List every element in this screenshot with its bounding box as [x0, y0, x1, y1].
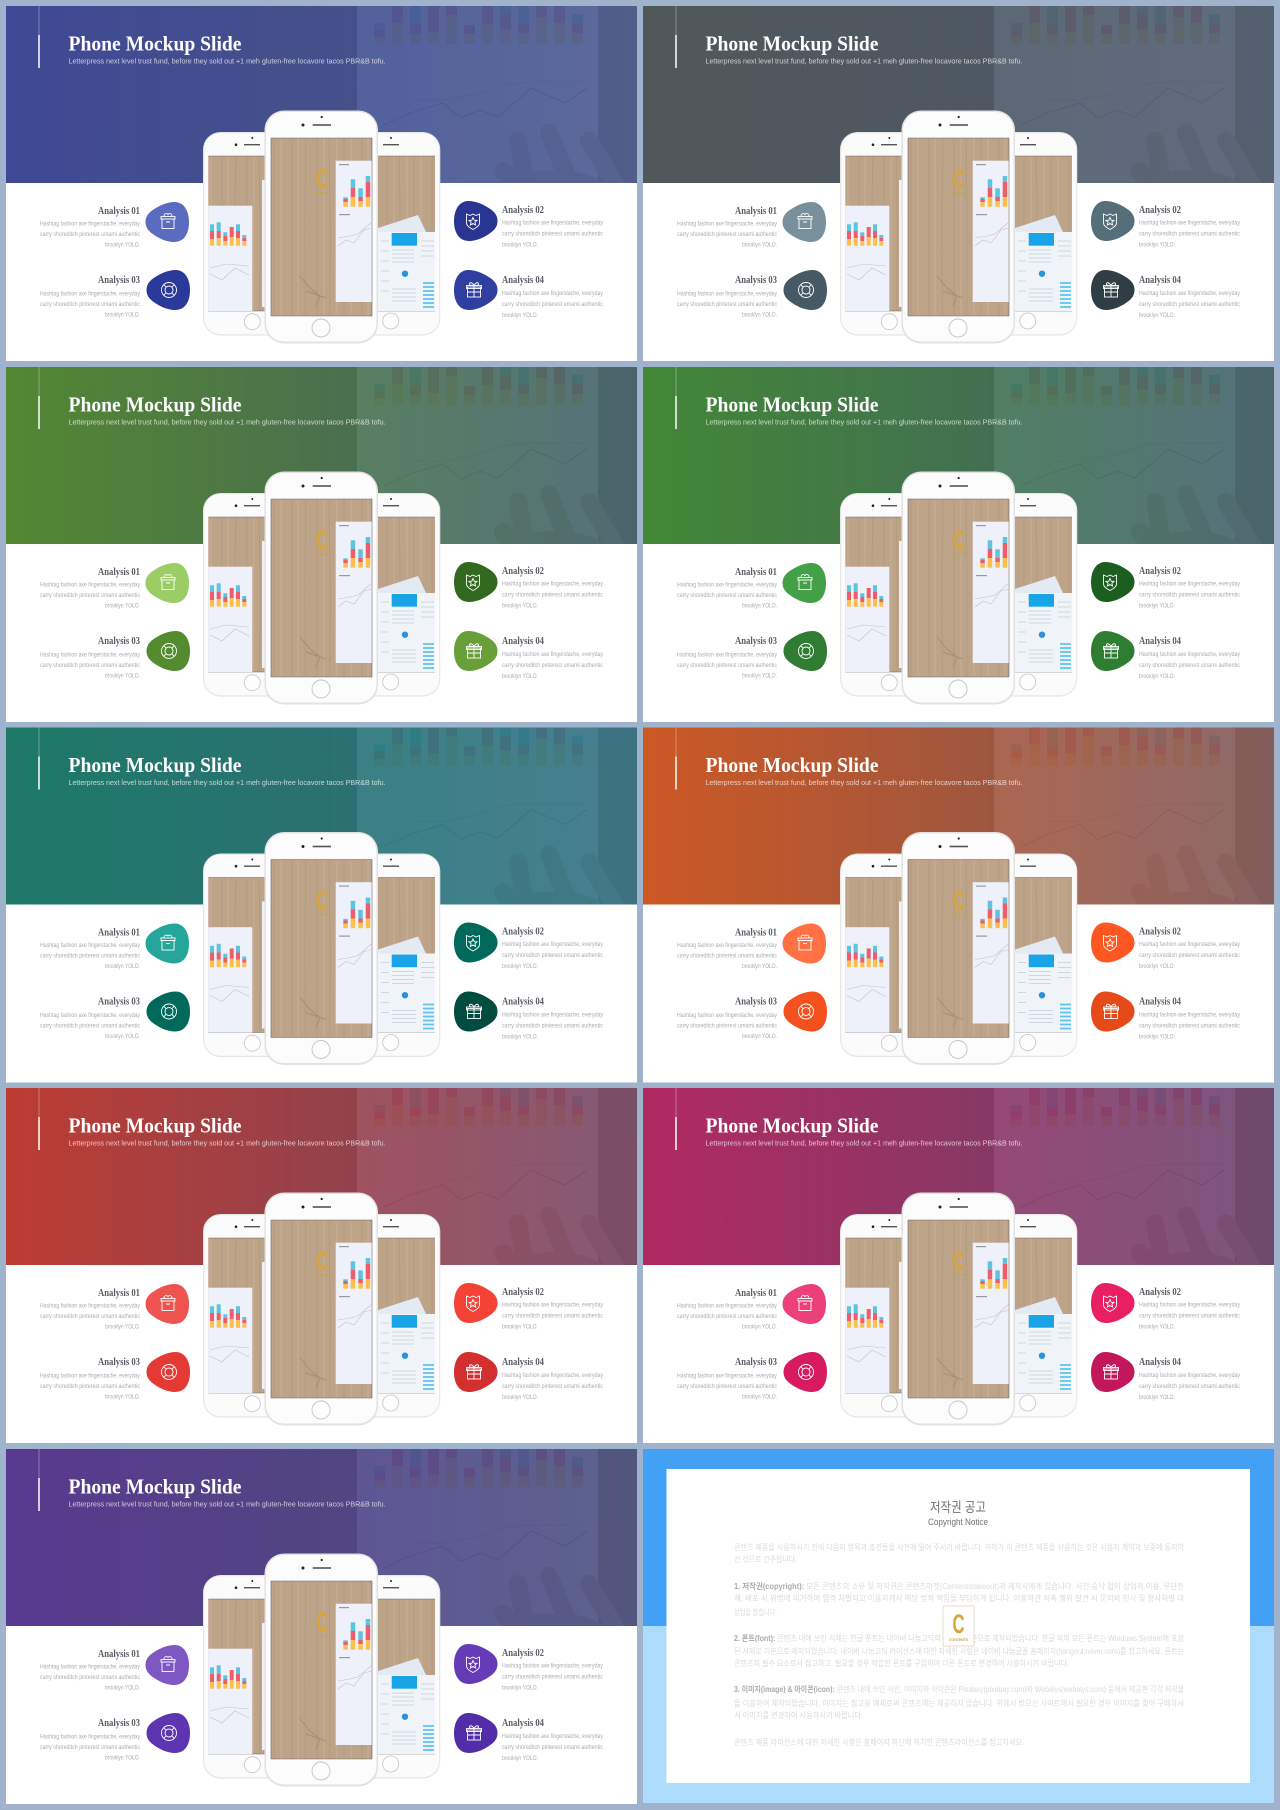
analysis 01	[40, 926, 140, 970]
analysis 03: Analysis 03	[735, 274, 777, 286]
subtitle: Letterpress next level trust fund, before they sold out +1 meh gluten-free locavore tacos PBR&B tofu.	[706, 56, 1022, 66]
analysis 01: Hashtag fashion axe fingerstache, everyday	[677, 582, 777, 588]
subtitle: Letterpress next level trust fund, before they sold out +1 meh gluten-free locavore tacos PBR&B tofu.	[68, 778, 386, 787]
subtitle: Letterpress next level trust fund, before they sold out +1 meh gluten-free locavore tacos PBR&B tofu.	[68, 418, 386, 426]
analysis 02: Analysis 02	[1139, 204, 1181, 216]
analysis 02	[502, 565, 603, 610]
analysis 03	[40, 635, 140, 680]
analysis 03: Analysis 03	[735, 635, 777, 647]
subtitle: Letterpress next level trust fund, before they sold out +1 meh gluten-free locavore tacos PBR&B tofu.	[68, 1138, 386, 1148]
analysis 04: carry shoreditch pinterest umami authentic	[502, 1384, 603, 1390]
icon: analysis 04 gift	[454, 1713, 498, 1753]
analysis 04: Hashtag fashion axe fingerstache, everyday	[502, 1373, 603, 1379]
analysis 04: carry shoreditch pinterest umami authentic	[1139, 1024, 1240, 1030]
analysis 04: Analysis 04	[502, 996, 544, 1008]
analysis 03: brooklyn YOLO.	[105, 1394, 140, 1400]
analysis 03: Analysis 03	[98, 1717, 140, 1729]
notice intro: 신 것으로 간주됩니다.	[734, 1554, 797, 1564]
analysis 01	[677, 926, 777, 970]
analysis 01: brooklyn YOLO.	[105, 242, 140, 248]
icon: analysis 03 lifebuoy	[146, 270, 190, 310]
icon: analysis 01 box	[782, 563, 826, 603]
analysis 03: carry shoreditch pinterest umami authentic	[677, 1024, 777, 1030]
analysis 02	[1139, 1286, 1240, 1330]
icon: analysis 04 gift	[1091, 1352, 1134, 1392]
icon: analysis 01 box	[782, 1284, 826, 1324]
analysis 04: Analysis 04	[1139, 1356, 1181, 1368]
analysis 01: Hashtag fashion axe fingerstache, everyday	[677, 943, 777, 949]
icon: analysis 03 lifebuoy	[784, 992, 827, 1032]
analysis 03: Hashtag fashion axe fingerstache, everyday	[677, 292, 777, 298]
notice section 3: 을 이용하여 제작되었습니다. 이미지는 참고용 예제로써 콘텐츠에는 제공하지 않습니다. 위에서 받으신 사이트에서 필요한 경우 이미지를 찾아 구매하셔	[734, 1698, 1184, 1708]
analysis 01: carry shoreditch pinterest umami authentic	[40, 954, 140, 960]
notice subheading: Copyright Notice	[928, 1517, 988, 1527]
icon: analysis 02 shield	[1091, 922, 1134, 962]
analysis 03: brooklyn YOLO.	[742, 674, 777, 680]
icon: analysis 01 box	[146, 1284, 189, 1324]
analysis 01: Hashtag fashion axe fingerstache, everyday	[40, 582, 140, 588]
analysis 03	[40, 996, 140, 1040]
analysis 01: brooklyn YOLO.	[742, 1324, 777, 1330]
analysis 02: brooklyn YOLO.	[502, 604, 538, 610]
analysis 01	[40, 1287, 140, 1330]
icon: analysis 03 lifebuoy	[784, 631, 827, 671]
analysis 04	[502, 1356, 603, 1401]
slide: copyright notice	[643, 1449, 1274, 1803]
analysis 04: carry shoreditch pinterest umami authentic	[1139, 302, 1240, 308]
phone mockups	[203, 110, 440, 344]
analysis 01: Hashtag fashion axe fingerstache, everyday	[677, 222, 777, 228]
analysis 01: brooklyn YOLO.	[105, 604, 140, 610]
notice heading: 저작권 공고	[930, 1500, 986, 1515]
analysis 02: brooklyn YOLO.	[502, 964, 538, 970]
icon: analysis 01 box	[146, 563, 189, 603]
analysis 03: Analysis 03	[98, 274, 140, 286]
analysis 04: brooklyn YOLO.	[502, 1756, 538, 1762]
analysis 01: brooklyn YOLO.	[742, 964, 777, 970]
title: Phone Mockup Slide	[68, 32, 242, 56]
analysis 01: carry shoreditch pinterest umami authentic	[677, 954, 777, 960]
analysis 03	[677, 1356, 777, 1400]
notice section 1: 재, 배포 시 위법에 의거하여 엄격 처벌되고 이용자께서 해당 법적 책임을 부담하게 됩니다. 이용약관 저촉 행위 발견 시 문의와 민사 및 형사처벌 대	[734, 1593, 1184, 1603]
phone mockups	[840, 110, 1077, 344]
analysis 02: brooklyn YOLO.	[1139, 604, 1175, 610]
analysis 04: brooklyn YOLO.	[502, 1395, 538, 1401]
subtitle: Letterpress next level trust fund, before they sold out +1 meh gluten-free locavore tacos PBR&B tofu.	[706, 778, 1022, 787]
analysis 04	[502, 635, 603, 680]
icon: analysis 01 box	[782, 202, 826, 242]
phone mockups	[203, 1554, 440, 1786]
title: Phone Mockup Slide	[706, 392, 878, 416]
analysis 04: Hashtag fashion axe fingerstache, everyday	[502, 291, 603, 297]
icon: analysis 02 shield	[1091, 201, 1134, 241]
analysis 04: Analysis 04	[1139, 274, 1181, 286]
phone mockups	[840, 472, 1077, 704]
analysis 01: brooklyn YOLO.	[742, 242, 777, 248]
analysis 03: brooklyn YOLO.	[742, 1394, 777, 1400]
icon: analysis 03 lifebuoy	[784, 270, 827, 310]
subtitle: Letterpress next level trust fund, before they sold out +1 meh gluten-free locavore tacos PBR&B tofu.	[68, 1500, 386, 1508]
slide: lime green	[6, 367, 637, 722]
title: Phone Mockup Slide	[706, 1114, 878, 1138]
analysis 04: brooklyn YOLO.	[502, 674, 538, 680]
analysis 01	[40, 1648, 140, 1692]
analysis 03: Hashtag fashion axe fingerstache, everyday	[40, 1374, 140, 1380]
analysis 01: brooklyn YOLO.	[105, 964, 140, 970]
analysis 01: carry shoreditch pinterest umami authentic	[40, 1314, 140, 1320]
analysis 02: carry shoreditch pinterest umami authentic	[502, 953, 603, 959]
analysis 01: Hashtag fashion axe fingerstache, everyday	[40, 1304, 140, 1310]
analysis 04	[1139, 996, 1240, 1040]
title: Phone Mockup Slide	[68, 1474, 242, 1498]
analysis 02	[502, 1647, 603, 1692]
icon: analysis 03 lifebuoy	[146, 992, 190, 1032]
analysis 02: Hashtag fashion axe fingerstache, everyday	[1139, 220, 1240, 226]
title: Phone Mockup Slide	[68, 1114, 242, 1138]
analysis 02: Analysis 02	[1139, 926, 1181, 938]
analysis 02: Analysis 02	[502, 565, 544, 577]
icon: analysis 04 gift	[454, 992, 498, 1032]
slide: orange	[643, 728, 1274, 1082]
analysis 03: Analysis 03	[98, 635, 140, 647]
analysis 04: Analysis 04	[502, 1356, 544, 1368]
analysis 03: Analysis 03	[98, 1356, 140, 1368]
analysis 02: carry shoreditch pinterest umami authentic	[1139, 1314, 1240, 1320]
analysis 04: Hashtag fashion axe fingerstache, everyday	[1139, 652, 1240, 658]
analysis 04: Analysis 04	[502, 635, 544, 647]
analysis 04: brooklyn YOLO.	[502, 313, 538, 319]
analysis 01: Analysis 01	[735, 566, 777, 578]
analysis 04: Analysis 04	[1139, 996, 1181, 1008]
icon: analysis 02 shield	[454, 922, 498, 962]
analysis 03: carry shoreditch pinterest umami authentic	[40, 1024, 140, 1030]
phone mockups	[203, 1192, 440, 1426]
logo watermark: C	[952, 1609, 964, 1639]
analysis 03: brooklyn YOLO.	[105, 1034, 140, 1040]
analysis 03: Hashtag fashion axe fingerstache, everyday	[677, 652, 777, 658]
analysis 03: Hashtag fashion axe fingerstache, everyday	[40, 292, 140, 298]
analysis 02: carry shoreditch pinterest umami authentic	[502, 232, 603, 238]
analysis 03: Analysis 03	[735, 1356, 777, 1368]
title: Phone Mockup Slide	[68, 392, 242, 416]
analysis 03: Hashtag fashion axe fingerstache, everyday	[40, 1013, 140, 1019]
analysis 02	[502, 204, 603, 248]
icon: analysis 01 box	[782, 924, 826, 964]
analysis 01: carry shoreditch pinterest umami authentic	[677, 1314, 777, 1320]
analysis 02: carry shoreditch pinterest umami authentic	[1139, 232, 1240, 238]
icon: analysis 03 lifebuoy	[146, 1352, 190, 1392]
analysis 01	[677, 1287, 777, 1330]
analysis 04	[1139, 1356, 1240, 1401]
icon: analysis 02 shield	[1091, 562, 1134, 602]
analysis 02: brooklyn YOLO.	[502, 1324, 538, 1330]
analysis 03: Analysis 03	[735, 996, 777, 1008]
analysis 03: carry shoreditch pinterest umami authentic	[40, 1384, 140, 1390]
icon: analysis 04 gift	[454, 270, 498, 310]
analysis 01: Analysis 01	[735, 926, 777, 938]
analysis 04: Analysis 04	[502, 1717, 544, 1729]
analysis 01: Analysis 01	[98, 926, 140, 938]
slide: teal	[6, 728, 637, 1082]
icon: analysis 04 gift	[1091, 992, 1134, 1032]
analysis 02: brooklyn YOLO.	[1139, 242, 1175, 248]
icon: analysis 04 gift	[1091, 631, 1134, 671]
analysis 04: brooklyn YOLO.	[502, 1034, 538, 1040]
notice section 2: 2. 폰트(font): 콘텐츠 내에 쓰인 서체는 한글 폰트는 네이버 나눔고딕의 서체를 기본으로 제작되었습니다. 한글 외의 모든 폰트는 Windows System에 포함	[734, 1633, 1185, 1643]
analysis 04: brooklyn YOLO.	[1139, 1395, 1175, 1401]
analysis 04: Hashtag fashion axe fingerstache, everyday	[1139, 291, 1240, 297]
subtitle: Letterpress next level trust fund, before they sold out +1 meh gluten-free locavore tacos PBR&B tofu.	[706, 418, 1022, 426]
phone mockups	[203, 472, 440, 704]
analysis 01: Hashtag fashion axe fingerstache, everyday	[40, 222, 140, 228]
analysis 03: brooklyn YOLO.	[742, 1034, 777, 1040]
slide: red	[6, 1088, 637, 1443]
analysis 02: carry shoreditch pinterest umami authentic	[1139, 592, 1240, 598]
analysis 02: brooklyn YOLO.	[502, 242, 538, 248]
analysis 04	[1139, 635, 1240, 680]
notice section 2: 콘텐츠의 필수 요소로서 참고하고, 필요할 경우 적합한 폰트를 구입하여 다른 폰트로 변경하여 사용하시기 바랍니다.	[734, 1658, 1069, 1668]
analysis 04: carry shoreditch pinterest umami authentic	[1139, 1384, 1240, 1390]
analysis 01: carry shoreditch pinterest umami authentic	[677, 593, 777, 599]
icon: analysis 01 box	[146, 202, 189, 242]
analysis 03: carry shoreditch pinterest umami authentic	[677, 663, 777, 669]
analysis 02: carry shoreditch pinterest umami authentic	[1139, 953, 1240, 959]
title: Phone Mockup Slide	[706, 32, 878, 56]
analysis 02	[1139, 565, 1240, 610]
analysis 02: Hashtag fashion axe fingerstache, everyday	[502, 1302, 603, 1308]
analysis 02: Hashtag fashion axe fingerstache, everyday	[1139, 942, 1240, 948]
analysis 01: brooklyn YOLO.	[742, 604, 777, 610]
analysis 01: Analysis 01	[98, 566, 140, 578]
analysis 02	[502, 926, 603, 970]
analysis 02: Analysis 02	[502, 926, 544, 938]
analysis 02: carry shoreditch pinterest umami authentic	[502, 1674, 603, 1680]
icon: analysis 02 shield	[454, 562, 498, 602]
logo watermark: CONTENTS	[949, 1638, 969, 1642]
analysis 02: Analysis 02	[502, 1286, 544, 1298]
analysis 04: brooklyn YOLO.	[1139, 674, 1175, 680]
icon: analysis 01 box	[146, 1645, 189, 1685]
analysis 04	[502, 1717, 603, 1762]
analysis 01: carry shoreditch pinterest umami authentic	[40, 1675, 140, 1681]
analysis 04: carry shoreditch pinterest umami authentic	[1139, 663, 1240, 669]
analysis 01: Analysis 01	[735, 1287, 777, 1299]
analysis 02	[1139, 204, 1240, 248]
icon: analysis 04 gift	[454, 631, 498, 671]
logo watermark	[943, 1606, 974, 1646]
analysis 01: Analysis 01	[735, 205, 777, 217]
analysis 01: Analysis 01	[98, 1648, 140, 1660]
analysis 03: carry shoreditch pinterest umami authentic	[40, 663, 140, 669]
notice section 1: 상임을 밝힙니다.	[734, 1607, 777, 1617]
analysis 04	[502, 996, 603, 1040]
notice section 3: 3. 이미지(image) & 아이콘(icon): 콘텐츠 내에 쓰인 사진, 이미지와 아이콘은 Pixabay(pixabay.com)와 Webalys(webalys.com) 등에서 제공한 각각 저작물	[734, 1684, 1184, 1694]
analysis 02: Analysis 02	[1139, 1286, 1181, 1298]
phone mockups	[840, 1192, 1077, 1426]
analysis 01: carry shoreditch pinterest umami authentic	[40, 232, 140, 238]
analysis 03	[40, 1717, 140, 1762]
analysis 02: Analysis 02	[502, 1647, 544, 1659]
analysis 03: Analysis 03	[98, 996, 140, 1008]
title: Phone Mockup Slide	[706, 753, 878, 777]
analysis 02: Hashtag fashion axe fingerstache, everyday	[502, 942, 603, 948]
analysis 04: Hashtag fashion axe fingerstache, everyday	[1139, 1012, 1240, 1018]
notice section 2	[734, 1633, 1185, 1668]
analysis 02	[1139, 926, 1240, 970]
analysis 01	[40, 566, 140, 610]
analysis 04	[502, 274, 603, 319]
analysis 04: Analysis 04	[1139, 635, 1181, 647]
analysis 02: brooklyn YOLO.	[502, 1686, 538, 1692]
slide: grey	[643, 6, 1274, 361]
title: Phone Mockup Slide	[68, 753, 242, 777]
analysis 01: Hashtag fashion axe fingerstache, everyday	[40, 1664, 140, 1670]
subtitle: Letterpress next level trust fund, before they sold out +1 meh gluten-free locavore tacos PBR&B tofu.	[68, 56, 386, 66]
analysis 04: carry shoreditch pinterest umami authentic	[502, 1745, 603, 1751]
analysis 01	[677, 205, 777, 248]
icon: analysis 04 gift	[1091, 270, 1134, 310]
notice section 1: 1. 저작권(copyright): 모든 콘텐츠의 소유 및 저작권은 콘텐츠마켓(Contentstakeout)과 제작사에게 있습니다. 사전 승낙 없이 상업적 이용, 무단전	[734, 1581, 1184, 1591]
notice intro: 콘텐츠 제품을 사용하시기 전에 다음의 항목과 조건들을 사전에 읽어 주시기 바랍니다. 귀하가 이 콘텐츠 제품을 사용하는 것은 사용자 계약과 보증에 동의하	[734, 1542, 1185, 1552]
analysis 02: Hashtag fashion axe fingerstache, everyday	[502, 582, 603, 588]
analysis 04: Hashtag fashion axe fingerstache, everyday	[1139, 1373, 1240, 1379]
analysis 02: brooklyn YOLO.	[1139, 1324, 1175, 1330]
slide: pink	[643, 1088, 1274, 1443]
analysis 02: Hashtag fashion axe fingerstache, everyday	[1139, 1302, 1240, 1308]
analysis 03: brooklyn YOLO.	[105, 312, 140, 318]
analysis 01	[40, 205, 140, 248]
analysis 03: Hashtag fashion axe fingerstache, everyday	[40, 1734, 140, 1740]
analysis 02: Hashtag fashion axe fingerstache, everyday	[502, 1664, 603, 1670]
icon: analysis 02 shield	[454, 1283, 498, 1323]
icon: analysis 03 lifebuoy	[146, 1713, 190, 1753]
analysis 03: brooklyn YOLO.	[105, 674, 140, 680]
icon: analysis 03 lifebuoy	[146, 631, 190, 671]
analysis 01: brooklyn YOLO.	[105, 1686, 140, 1692]
analysis 04: Analysis 04	[502, 274, 544, 286]
notice intro	[734, 1542, 1185, 1564]
analysis 01	[677, 566, 777, 610]
notice section 3	[734, 1684, 1184, 1720]
analysis 02: carry shoreditch pinterest umami authentic	[502, 592, 603, 598]
slide: blue	[6, 6, 637, 361]
analysis 03	[677, 996, 777, 1040]
slide: green	[643, 367, 1274, 722]
analysis 03: carry shoreditch pinterest umami authentic	[40, 302, 140, 308]
slide: purple	[6, 1449, 637, 1804]
analysis 01: carry shoreditch pinterest umami authentic	[677, 232, 777, 238]
icon: analysis 01 box	[146, 924, 189, 964]
notice footer: 콘텐츠 제품 라이선스에 대한 자세한 사항은 홈페이지 하단에 위치한 콘텐츠라이선스를 참고하세요.	[734, 1737, 1024, 1747]
analysis 03: carry shoreditch pinterest umami authentic	[677, 1384, 777, 1390]
analysis 04: Hashtag fashion axe fingerstache, everyday	[502, 652, 603, 658]
analysis 02: Hashtag fashion axe fingerstache, everyday	[1139, 582, 1240, 588]
analysis 04: brooklyn YOLO.	[1139, 1034, 1175, 1040]
analysis 04	[1139, 274, 1240, 319]
icon: analysis 04 gift	[454, 1352, 498, 1392]
phone mockups	[203, 832, 440, 1065]
analysis 03: Hashtag fashion axe fingerstache, everyday	[677, 1013, 777, 1019]
analysis 01: Hashtag fashion axe fingerstache, everyday	[677, 1304, 777, 1310]
analysis 04: Hashtag fashion axe fingerstache, everyday	[502, 1012, 603, 1018]
analysis 04: brooklyn YOLO.	[1139, 313, 1175, 319]
analysis 03: brooklyn YOLO.	[105, 1756, 140, 1762]
analysis 04: carry shoreditch pinterest umami authentic	[502, 1024, 603, 1030]
analysis 03: brooklyn YOLO.	[742, 312, 777, 318]
analysis 04: carry shoreditch pinterest umami authentic	[502, 302, 603, 308]
analysis 03	[677, 635, 777, 680]
analysis 02	[502, 1286, 603, 1330]
analysis 03: carry shoreditch pinterest umami authentic	[40, 1745, 140, 1751]
analysis 03	[40, 1356, 140, 1400]
analysis 01: Analysis 01	[98, 1287, 140, 1299]
icon: analysis 02 shield	[454, 201, 498, 241]
analysis 02: Analysis 02	[1139, 565, 1181, 577]
analysis 01: Hashtag fashion axe fingerstache, everyday	[40, 943, 140, 949]
analysis 03	[677, 274, 777, 318]
analysis 01: carry shoreditch pinterest umami authentic	[40, 593, 140, 599]
notice section 3: 서 이미지를 변경하여 사용하시기 바랍니다.	[734, 1710, 863, 1720]
icon: analysis 02 shield	[1091, 1283, 1134, 1323]
analysis 03: Hashtag fashion axe fingerstache, everyday	[677, 1374, 777, 1380]
notice section 2: 된 서체로 기본으로 제작되었습니다. 네이버 나눔고딕 라이선스에 대한 자세한 사항은 네이버 나눔글꼴 홈페이지(hangeul.naver.com)를 참고하세요. 폰트는	[734, 1646, 1184, 1656]
icon: analysis 02 shield	[454, 1644, 498, 1684]
subtitle: Letterpress next level trust fund, before they sold out +1 meh gluten-free locavore tacos PBR&B tofu.	[706, 1138, 1022, 1148]
analysis 04: carry shoreditch pinterest umami authentic	[502, 663, 603, 669]
icon: analysis 03 lifebuoy	[784, 1352, 827, 1392]
analysis 01: brooklyn YOLO.	[105, 1324, 140, 1330]
analysis 04: Hashtag fashion axe fingerstache, everyday	[502, 1734, 603, 1740]
analysis 03	[40, 274, 140, 318]
analysis 03: carry shoreditch pinterest umami authentic	[677, 302, 777, 308]
phone mockups	[840, 832, 1077, 1065]
analysis 02: carry shoreditch pinterest umami authentic	[502, 1314, 603, 1320]
analysis 02: Analysis 02	[502, 204, 544, 216]
analysis 02: brooklyn YOLO.	[1139, 964, 1175, 970]
analysis 03: Hashtag fashion axe fingerstache, everyday	[40, 652, 140, 658]
analysis 02: Hashtag fashion axe fingerstache, everyday	[502, 220, 603, 226]
analysis 01: Analysis 01	[98, 205, 140, 217]
notice section 1	[734, 1581, 1184, 1617]
